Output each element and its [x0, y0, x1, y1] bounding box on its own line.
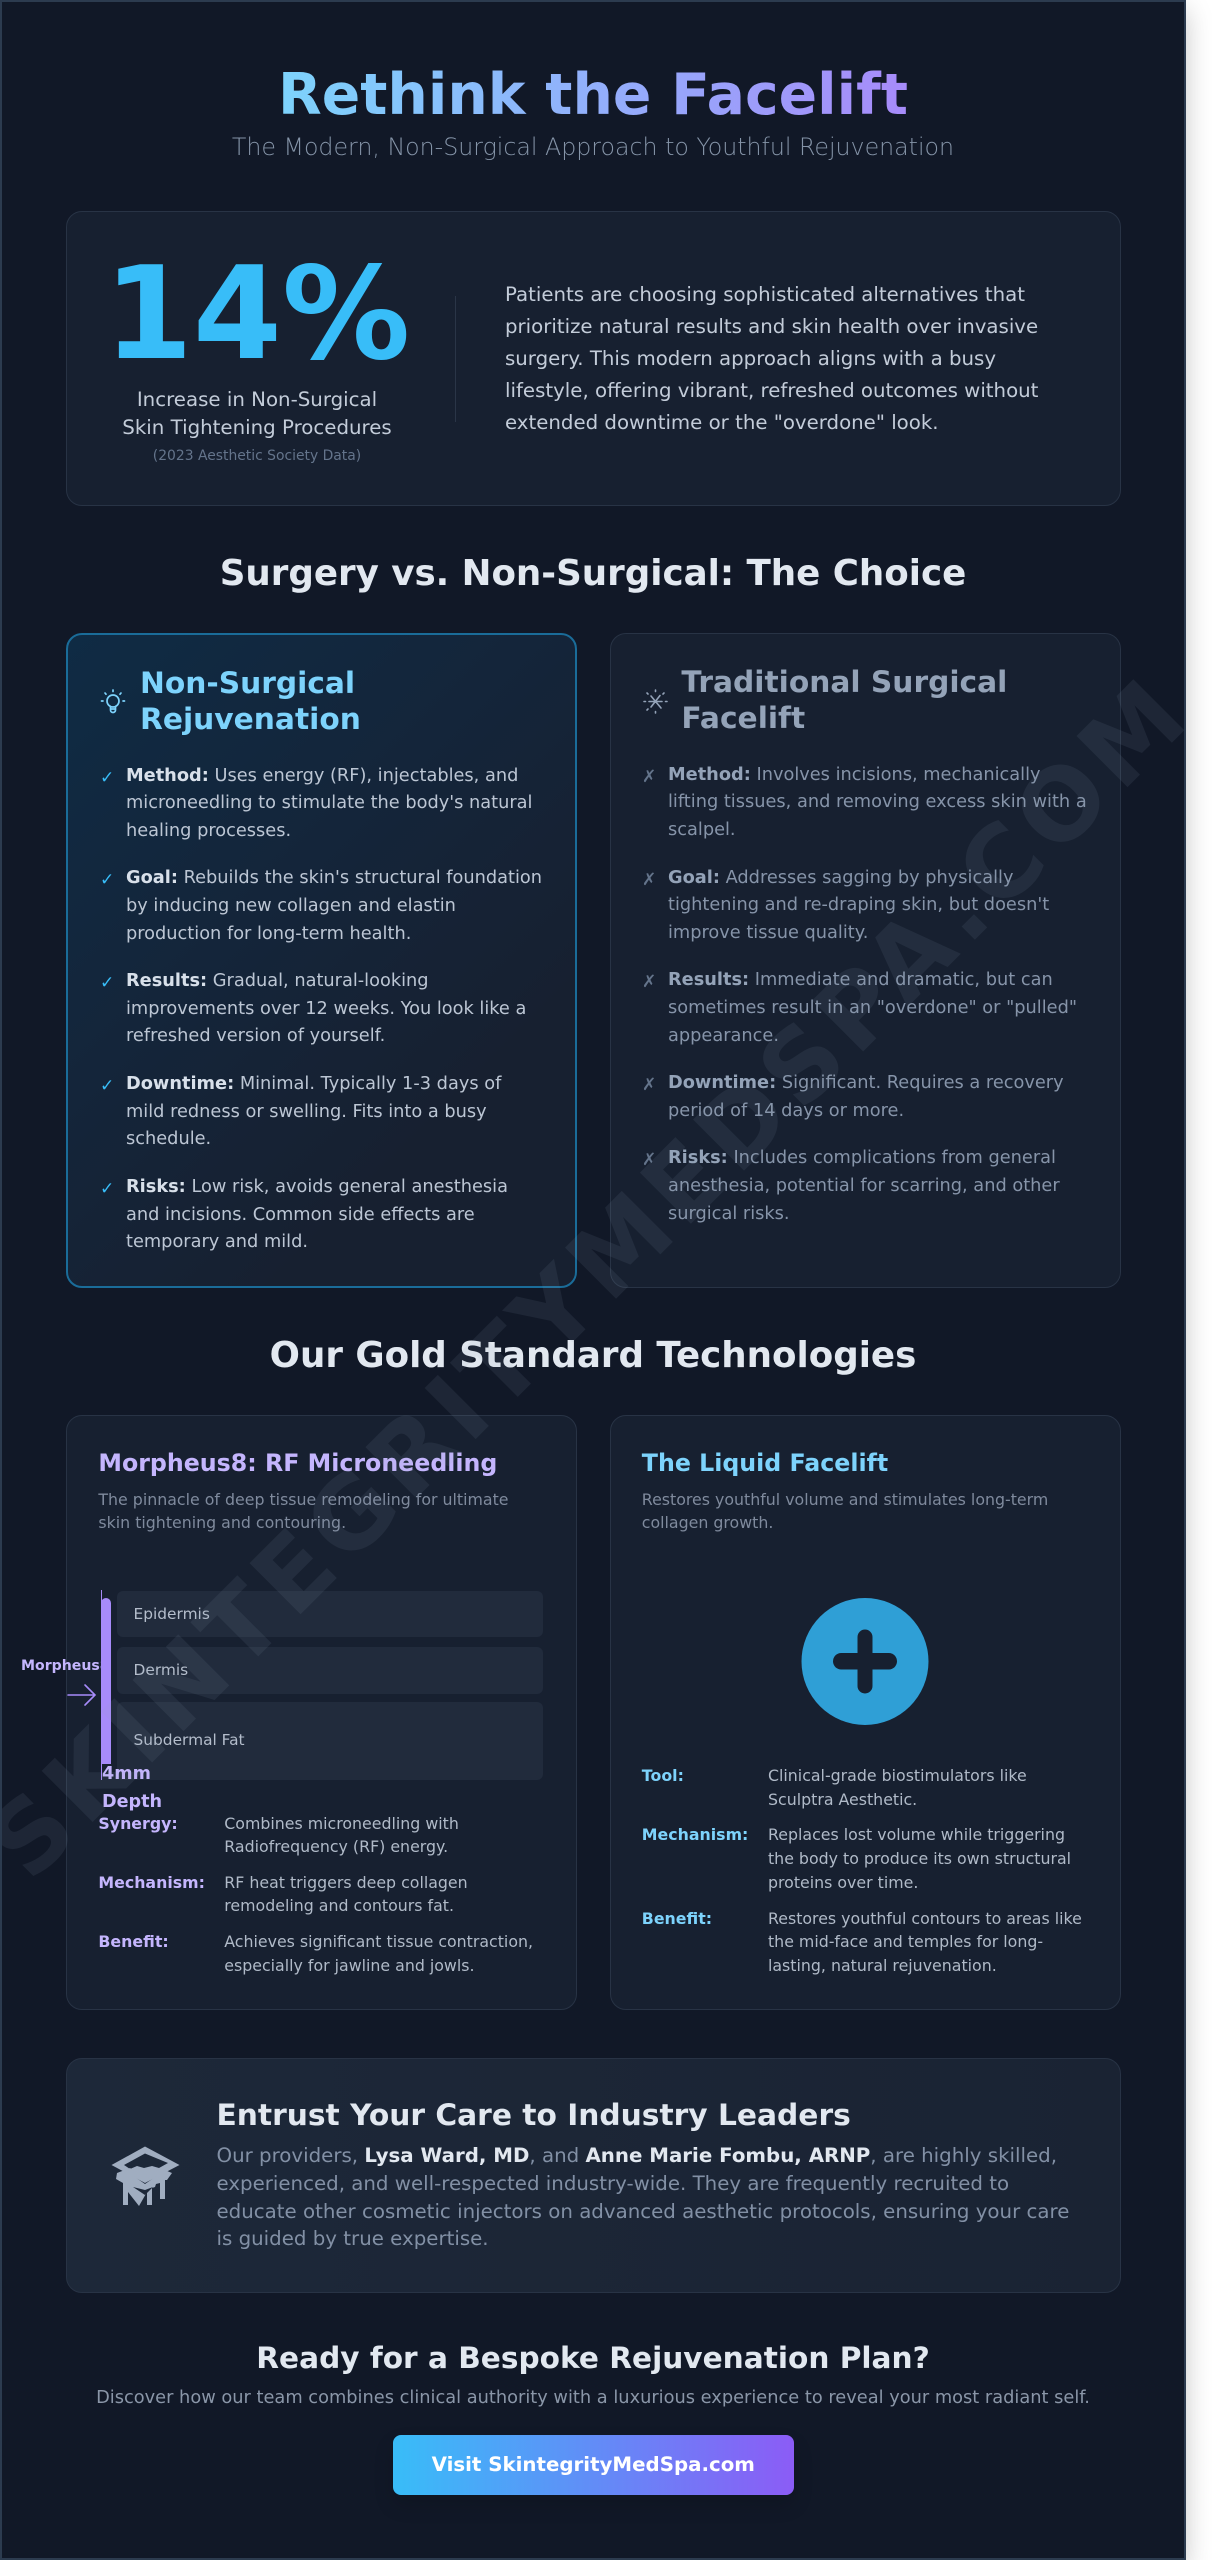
value: [224, 1814, 459, 1856]
value: [768, 1908, 1082, 1975]
item: risks: temporary and mild.: [126, 1232, 308, 1252]
hero paragraph: lifestyle, offering vibrant, refreshed outcomes without: [505, 379, 1038, 402]
list: traditional surgical: [642, 765, 1087, 1224]
heading: non-surgical: [140, 666, 361, 737]
panel: traditional surgical: [610, 633, 1120, 1288]
item: risks: Risks: Includes complications from general: [668, 1148, 1056, 1168]
value: proteins over time.: [768, 1873, 918, 1892]
item: results: [100, 971, 526, 1046]
value: [224, 1932, 533, 1975]
hero divider: [455, 296, 456, 422]
value: Replaces lost volume while triggering: [768, 1825, 1065, 1844]
value: Combines microneedling with: [224, 1814, 459, 1832]
item: results: sometimes result in an "overdone" or "pulled": [668, 998, 1077, 1018]
description: morpheus8: The pinnacle of deep tissue remodeling for ultimate: [98, 1490, 508, 1508]
stat label: [122, 388, 392, 439]
value: Restores youthful contours to areas like: [768, 1908, 1082, 1928]
panel: hero statistic: [66, 211, 1120, 506]
item: goal: Goal: Rebuilds the skin's structural foundation: [126, 868, 542, 888]
heading: comparison: Surgery vs. Non-Surgical: The Choice: [220, 553, 966, 594]
infographic page: ✗: [642, 1150, 656, 1170]
heading: morpheus8: Morpheus8: RF Microneedling: [98, 1449, 497, 1477]
stat source note: (2023 Aesthetic Society Data): [153, 448, 361, 464]
value: [768, 1825, 1071, 1892]
label: Tool:: [642, 1766, 684, 1785]
label: Synergy:: [98, 1814, 178, 1832]
item: goal: Goal: Addresses sagging by physically: [668, 868, 1013, 888]
label: 4mm depth: 4mm: [102, 1764, 151, 1784]
row: benefit: [98, 1932, 533, 1975]
icon: graduation cap: [112, 2146, 180, 2206]
stat label: Skin Tightening Procedures: [122, 416, 392, 439]
value: Radiofrequency (RF) energy.: [224, 1837, 448, 1856]
panel: morpheus8: [66, 1415, 577, 2010]
button: visit website: [392, 2435, 794, 2495]
infographic page: ✗: [642, 870, 656, 890]
infographic page: ✓: [100, 768, 114, 788]
hero paragraph: [505, 283, 1038, 434]
description: liquid facelift: [642, 1490, 1048, 1532]
row: mechanism: [642, 1825, 1071, 1892]
value: especially for jawline and jowls.: [224, 1956, 474, 1975]
icon: light bulb: [100, 689, 126, 714]
layer: epidermis: [117, 1591, 542, 1637]
panel: industry leaders: [66, 2058, 1120, 2293]
item: results: refreshed version of yourself.: [126, 1026, 385, 1046]
item: method: Method: Uses energy (RF), injectables, and: [126, 766, 518, 786]
needle bar: [101, 1598, 110, 1764]
label: Mechanism:: [98, 1872, 205, 1892]
label: epidermis: Epidermis: [134, 1604, 210, 1622]
paragraph: industry leaders: educate other cosmetic injectors on advanced aesthetic protocols, ensuring your care: [216, 2200, 1069, 2223]
hero paragraph: prioritize natural results and skin health over invasive: [505, 315, 1038, 338]
item: risks: [642, 1148, 1060, 1224]
item: goal: [100, 868, 542, 944]
label: 4mm depth: [102, 1764, 162, 1812]
value: [768, 1766, 1027, 1809]
layer: subdermal fat: [117, 1702, 542, 1780]
infographic page: ✗: [642, 767, 656, 787]
infographic page: ✓: [100, 1179, 114, 1199]
item: goal: [642, 868, 1049, 943]
row: mechanism: [98, 1872, 468, 1915]
label: dermis: Dermis: [134, 1660, 188, 1678]
description: morpheus8: [98, 1490, 508, 1532]
infographic page: ✗: [642, 972, 656, 992]
item: method: healing processes.: [126, 821, 291, 841]
label: Benefit:: [98, 1932, 169, 1951]
paragraph: industry leaders: [216, 2144, 1069, 2250]
heading: traditional surgical: Facelift: [681, 701, 805, 736]
icon: scalpel spark: [643, 689, 668, 714]
heading: non-surgical: Rejuvenation: [140, 702, 361, 737]
stat: 14%: 14%: [104, 240, 410, 389]
item: results: Results: Gradual, natural-looking: [126, 971, 429, 991]
description: liquid facelift: collagen growth.: [642, 1513, 773, 1532]
item: method: [100, 766, 532, 841]
title: Rethink the Facelift: [278, 62, 908, 128]
item: results: appearance.: [668, 1026, 779, 1046]
heading: traditional surgical: Traditional Surgical: [681, 665, 1007, 700]
item: results: [642, 970, 1077, 1046]
heading: technologies: Our Gold Standard Technologies: [270, 1335, 916, 1376]
value: remodeling and contours fat.: [224, 1896, 454, 1915]
panel: liquid facelift: [610, 1415, 1120, 2010]
item: downtime: [642, 1073, 1064, 1121]
item: method: Method: Involves incisions, mechanically: [668, 765, 1041, 785]
item: downtime: period of 14 days or more.: [668, 1101, 904, 1121]
item: goal: production for long-term health.: [126, 924, 411, 944]
item: risks: [100, 1177, 508, 1252]
paragraph: industry leaders: experienced, and well-respected industry-wide. They are frequently recruited to: [216, 2172, 1009, 2195]
paragraph: industry leaders: Our providers, Lysa Ward, MD, and Anne Marie Fombu, ARNP, are highly skilled,: [216, 2144, 1057, 2167]
description: morpheus8: skin tightening and contouring.: [98, 1513, 346, 1532]
item: downtime: mild redness or swelling. Fits into a busy: [126, 1102, 487, 1122]
text: call to action: Discover how our team combines clinical authority with a luxurious experience to reveal your most radiant self.: [96, 2387, 1090, 2408]
label: morpheus device: Morpheus8: [21, 1658, 110, 1674]
panel: non-surgical: [66, 633, 577, 1288]
value: Achieves significant tissue contraction,: [224, 1932, 533, 1951]
arrow: device to skin: [67, 1684, 96, 1706]
row: synergy: [98, 1814, 459, 1856]
value: lasting, natural rejuvenation.: [768, 1956, 997, 1975]
item: goal: improve tissue quality.: [668, 923, 868, 943]
hero paragraph: Patients are choosing sophisticated alternatives that: [505, 283, 1025, 306]
label: Benefit:: [642, 1908, 712, 1928]
heading: call to action: Ready for a Bespoke Rejuvenation Plan?: [256, 2340, 930, 2374]
paragraph: industry leaders: is guided by true expertise.: [216, 2227, 489, 2250]
item: downtime: [100, 1074, 502, 1149]
item: downtime: schedule.: [126, 1129, 211, 1149]
layer: dermis: [117, 1647, 542, 1694]
subtitle: The Modern, Non-Surgical Approach to Youthful Rejuvenation: [232, 133, 954, 161]
description: liquid facelift: Restores youthful volume and stimulates long-term: [642, 1490, 1048, 1508]
hero paragraph: extended downtime or the "overdone" look.: [505, 411, 939, 434]
icon: plus circle: [802, 1598, 928, 1725]
button: visit website: Visit SkintegrityMedSpa.com: [432, 2453, 755, 2476]
diagram: skin layers: [21, 1590, 543, 1812]
depth tick line: [101, 1590, 102, 1780]
list: non-surgical: [100, 766, 542, 1252]
item: goal: by inducing new collagen and elastin: [126, 896, 456, 916]
label: Mechanism:: [642, 1825, 748, 1844]
item: method: scalpel.: [668, 820, 736, 840]
item: goal: tightening and re-draping skin, but doesn't: [668, 895, 1049, 915]
value: [224, 1872, 468, 1915]
item: method: microneedling to stimulate the body's natural: [126, 793, 532, 813]
item: method: [642, 765, 1087, 840]
heading: traditional surgical: [681, 665, 1007, 736]
stat label: Increase in Non-Surgical: [137, 388, 377, 411]
row: tool: [642, 1766, 1027, 1809]
row: benefit: [642, 1908, 1082, 1975]
item: results: improvements over 12 weeks. You look like a: [126, 999, 526, 1019]
value: the body to produce its own structural: [768, 1849, 1071, 1868]
hero paragraph: surgery. This modern approach aligns with a busy: [505, 347, 996, 370]
item: risks: surgical risks.: [668, 1204, 790, 1224]
heading: industry leaders: Entrust Your Care to Industry Leaders: [216, 2098, 851, 2133]
item: downtime: Downtime: Minimal. Typically 1-3 days of: [126, 1074, 501, 1094]
heading: non-surgical: Non-Surgical: [140, 666, 355, 701]
value: Clinical-grade biostimulators like: [768, 1766, 1027, 1785]
item: risks: Risks: Low risk, avoids general anesthesia: [126, 1177, 508, 1197]
value: the mid-face and temples for long-: [768, 1932, 1043, 1951]
item: risks: and incisions. Common side effects are: [126, 1205, 475, 1225]
item: method: lifting tissues, and removing excess skin with a: [668, 792, 1087, 812]
heading: liquid facelift: The Liquid Facelift: [642, 1449, 888, 1477]
infographic page: ✓: [100, 973, 114, 993]
value: Sculptra Aesthetic.: [768, 1790, 917, 1809]
value: RF heat triggers deep collagen: [224, 1872, 468, 1892]
infographic page: ✓: [100, 870, 114, 890]
label: 4mm depth: Depth: [102, 1792, 162, 1812]
label: subdermal fat: Subdermal Fat: [134, 1731, 245, 1749]
item: results: Results: Immediate and dramatic, but can: [668, 970, 1053, 990]
item: risks: anesthesia, potential for scarring, and other: [668, 1176, 1060, 1196]
infographic page: ✓: [100, 1076, 114, 1096]
item: downtime: Downtime: Significant. Requires a recovery: [668, 1073, 1064, 1093]
infographic page: ✗: [642, 1075, 656, 1095]
